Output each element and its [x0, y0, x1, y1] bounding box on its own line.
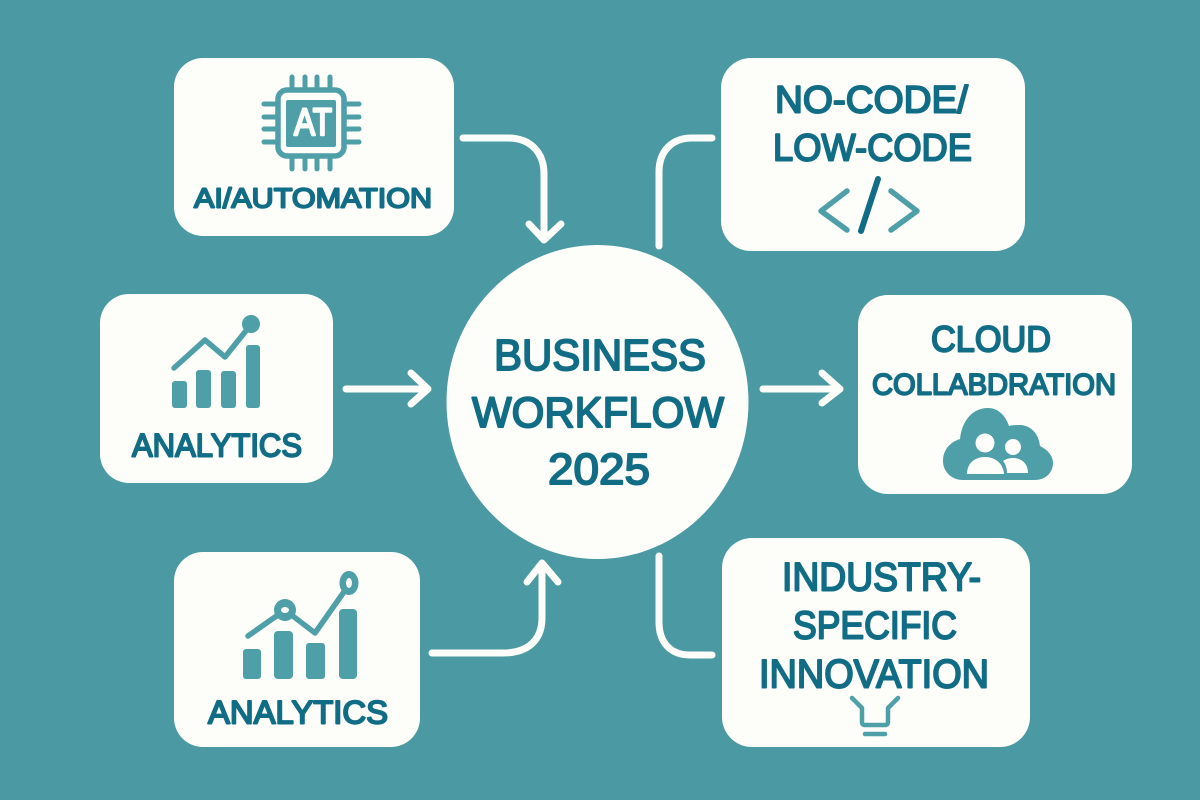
heading: 2025: 2025: [548, 445, 650, 494]
label: Analytics: ANALYTICS: [208, 694, 388, 730]
panel: AI/Automation: [174, 58, 454, 236]
heading: Business: BUSINESS: [494, 331, 706, 380]
icon: analytics chart: [172, 315, 260, 408]
label: Innovation: INNOVATION: [759, 652, 989, 696]
panel: Cloud Collaboration: [858, 295, 1132, 494]
heading: Workflow: WORKFLOW: [472, 389, 724, 437]
label: Low-Code: LOW-CODE: [773, 128, 972, 170]
icon: light bulb base: [852, 698, 898, 734]
icon: analytics chart with nodes: [243, 571, 358, 679]
icon: AI chip: AT: [294, 102, 332, 144]
arrow: AI/Automation to centre: [463, 138, 561, 240]
arrow: Analytics to centre: [346, 373, 428, 404]
label: Collabdration: COLLABDRATION: [872, 368, 1116, 402]
label: Specific: SPECIFIC: [793, 604, 957, 648]
connector: centre to Industry-Specific Innovation: [659, 556, 712, 655]
connector: centre to No-Code/Low-Code: [659, 138, 712, 246]
central circle: Business Workflow 2025: [446, 245, 748, 559]
label: Analytics: ANALYTICS: [132, 428, 302, 464]
icon: cloud with people: [943, 408, 1053, 480]
label: Industry-: INDUSTRY-: [782, 556, 981, 600]
panel: Industry-Specific Innovation: [722, 538, 1030, 747]
arrow: centre to Cloud Collaboration: [763, 373, 840, 403]
panel: Analytics: [100, 294, 333, 483]
label: AI/Automation: AI/AUTOMATION: [194, 182, 432, 214]
panel: lower Analytics: [174, 552, 420, 747]
icon: AI chip: [264, 77, 359, 169]
arrow: lower Analytics to centre: [432, 563, 558, 653]
icon: code brackets: [821, 179, 917, 231]
label: Cloud: CLOUD: [931, 318, 1051, 360]
panel: No-Code/Low-Code: [721, 58, 1025, 251]
label: No-Code/: NO-CODE/: [775, 80, 968, 122]
